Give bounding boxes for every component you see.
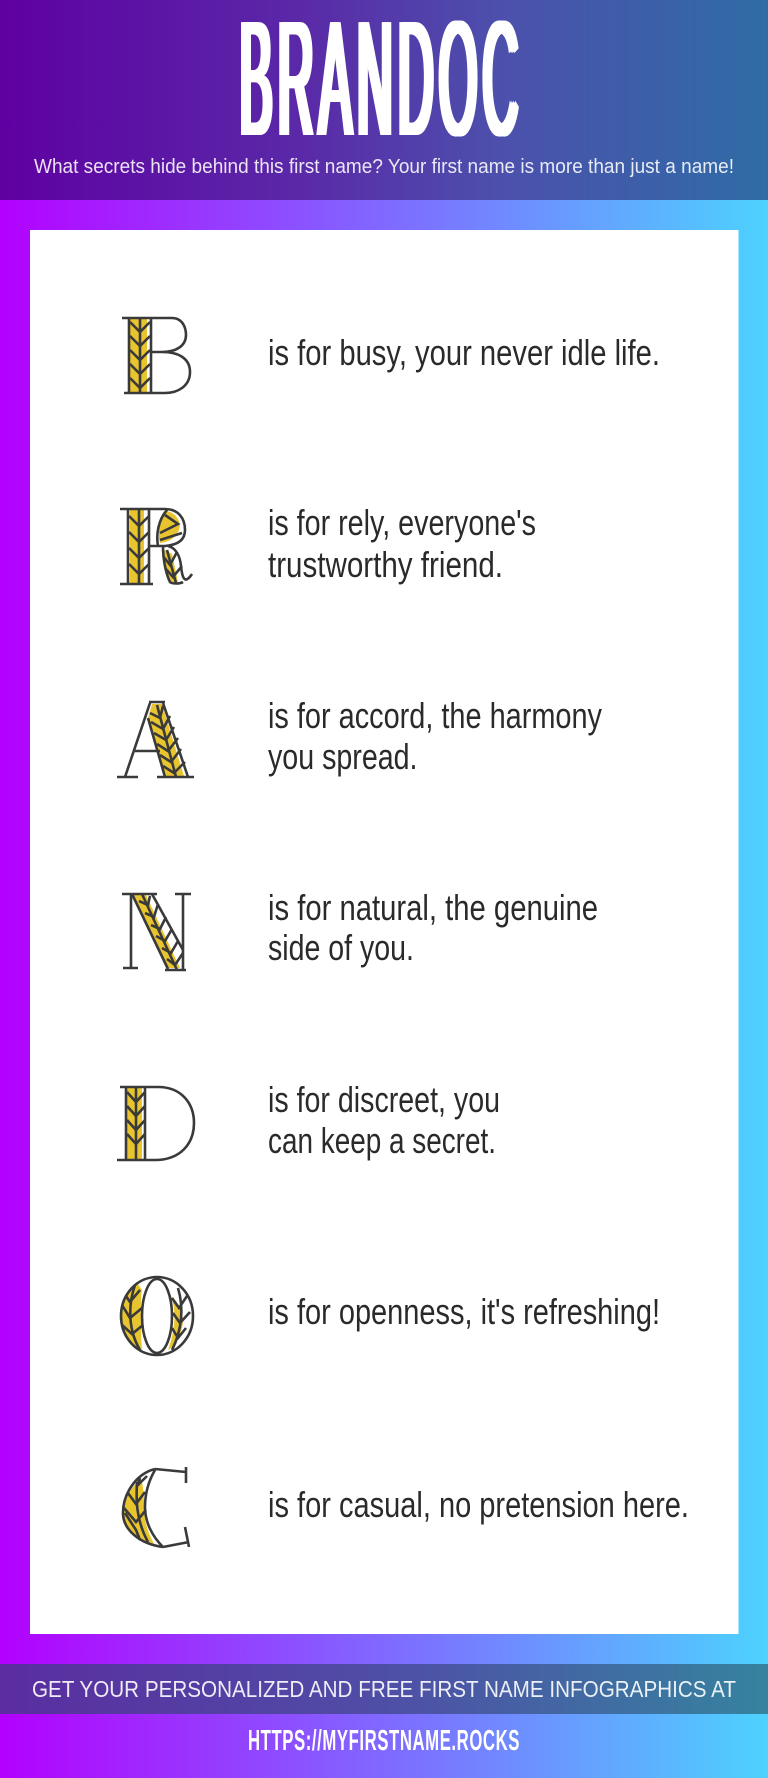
text: A: you spread.	[268, 736, 418, 777]
text: R: trustworthy friend.	[268, 544, 503, 585]
icon: letter B with wheat	[122, 318, 190, 393]
text: A: is for accord, the harmony	[268, 695, 602, 736]
footer url: HTTPS://MYFIRSTNAME.ROCKS	[248, 1725, 520, 1757]
icon: letter N with wheat	[122, 894, 191, 970]
row: R	[120, 502, 536, 585]
row: D	[117, 1079, 500, 1161]
icon: letter A with wheat	[117, 702, 194, 777]
main panel	[30, 230, 738, 1634]
icon: letter O with wheat	[121, 1277, 193, 1355]
text: N: side of you.	[268, 927, 414, 968]
row: A	[117, 695, 602, 777]
text: D: is for discreet, you	[268, 1079, 500, 1120]
subtitle: What secrets hide behind this first name? Your first name is more than just a name!	[34, 156, 734, 178]
text: N: is for natural, the genuine	[268, 887, 598, 928]
icon: letter C with wheat	[123, 1467, 189, 1547]
row: N	[122, 887, 598, 970]
icon: letter D with wheat	[117, 1087, 194, 1160]
text: B: is for busy, your never idle life.	[268, 332, 660, 373]
footer band	[0, 1664, 768, 1714]
icon: letter R with wheat	[120, 509, 192, 584]
header banner	[0, 0, 768, 200]
row: B	[122, 318, 660, 393]
text: D: can keep a secret.	[268, 1120, 496, 1161]
text: O: is for openness, it's refreshing!	[268, 1291, 660, 1332]
text: R: is for rely, everyone's	[268, 502, 536, 543]
row: O	[121, 1277, 660, 1355]
row: C	[123, 1467, 689, 1547]
